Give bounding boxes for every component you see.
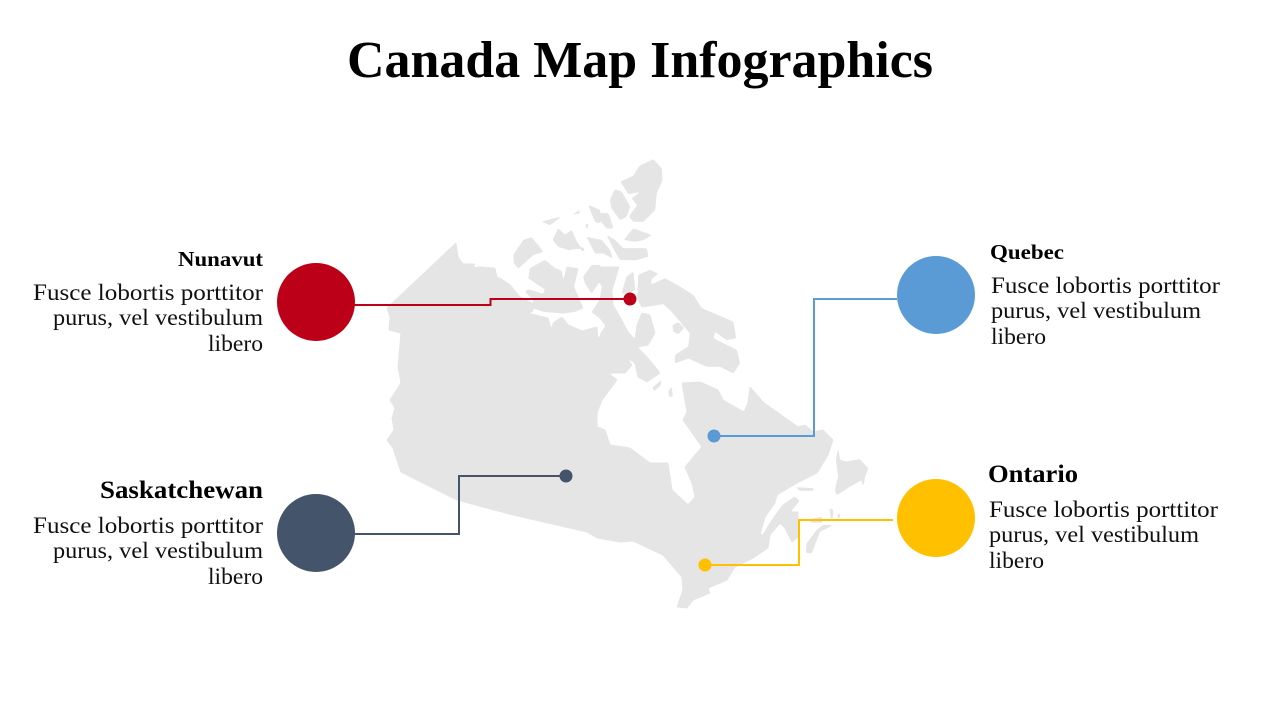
connector: Ontario	[698, 520, 893, 572]
text block: Nunavut: Nunavut	[178, 247, 264, 271]
title: Canada Map Infographics	[347, 32, 933, 89]
connector: Nunavut	[354, 292, 636, 306]
text block: Nunavut: Fusce lobortis porttitor	[33, 280, 263, 305]
text block: Nunavut	[33, 247, 264, 356]
text block: Saskatchewan: purus, vel vestibulum	[53, 538, 263, 563]
text block: Nunavut: libero	[208, 331, 263, 356]
map of Canada	[387, 159, 868, 608]
text block: Ontario: libero	[989, 548, 1044, 573]
text block: Nunavut: purus, vel vestibulum	[53, 305, 263, 330]
marker circle: Ontario	[897, 479, 975, 557]
marker circle: Saskatchewan	[277, 494, 355, 572]
text block: Saskatchewan	[33, 477, 263, 589]
text block: Ontario	[988, 461, 1218, 573]
text block: Saskatchewan: libero	[208, 564, 263, 589]
text block: Ontario: purus, vel vestibulum	[989, 522, 1199, 547]
text block: Quebec: libero	[991, 324, 1046, 349]
text block: Quebec	[990, 240, 1220, 349]
connector: Quebec	[708, 299, 897, 442]
atlantic islands	[653, 382, 868, 553]
text block: Quebec: Quebec	[990, 240, 1064, 264]
mainland	[387, 243, 833, 608]
marker circle: Quebec	[897, 256, 975, 334]
text block: Saskatchewan: Saskatchewan	[100, 477, 263, 504]
marker circle: Nunavut	[277, 263, 355, 341]
text block: Ontario: Fusce lobortis porttitor	[989, 497, 1218, 522]
arctic islands west	[513, 205, 648, 313]
text block: Saskatchewan: Fusce lobortis porttitor	[33, 513, 263, 538]
connector: Saskatchewan	[354, 470, 572, 534]
text block: Quebec: purus, vel vestibulum	[991, 298, 1201, 323]
arctic islands east, Baffin and Ellesmere	[600, 159, 740, 388]
text block: Quebec: Fusce lobortis porttitor	[991, 273, 1220, 298]
text block: Ontario: Ontario	[988, 461, 1078, 488]
